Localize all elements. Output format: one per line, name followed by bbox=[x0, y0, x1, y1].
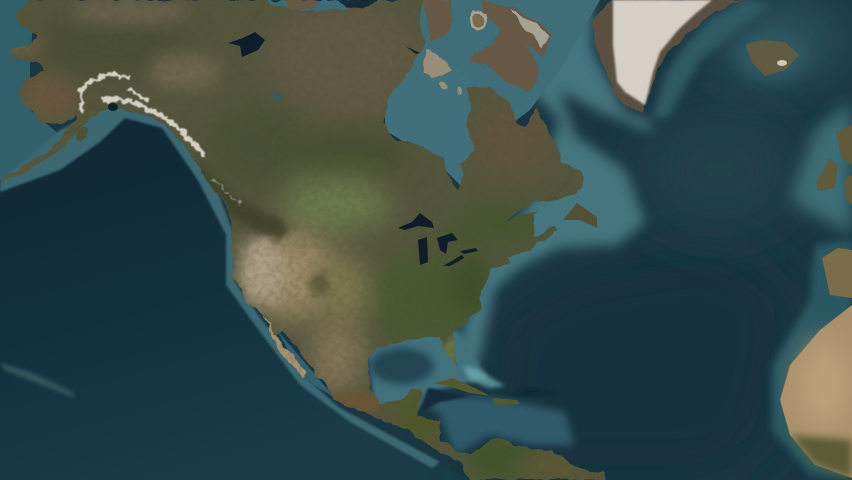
North America landmass bbox=[0, 0, 606, 480]
Greenland bbox=[592, 0, 742, 113]
Prince William Sound bbox=[108, 103, 118, 111]
Africa bbox=[780, 305, 852, 478]
Great Lakes bbox=[228, 32, 478, 266]
Hudson Bay bbox=[385, 43, 510, 195]
Iceland bbox=[745, 40, 799, 76]
Caribbean islands bbox=[433, 366, 520, 405]
Iberia bbox=[822, 248, 852, 298]
Newfoundland bbox=[563, 203, 597, 228]
Kodiak Island bbox=[73, 125, 91, 143]
Baffin and Arctic islands bbox=[262, 0, 553, 95]
Gulf of Mexico and Caribbean bbox=[365, 330, 575, 455]
Britain and Ireland bbox=[816, 125, 852, 205]
Alaska snow bbox=[80, 73, 240, 205]
Hawaiian chain bbox=[0, 363, 75, 398]
